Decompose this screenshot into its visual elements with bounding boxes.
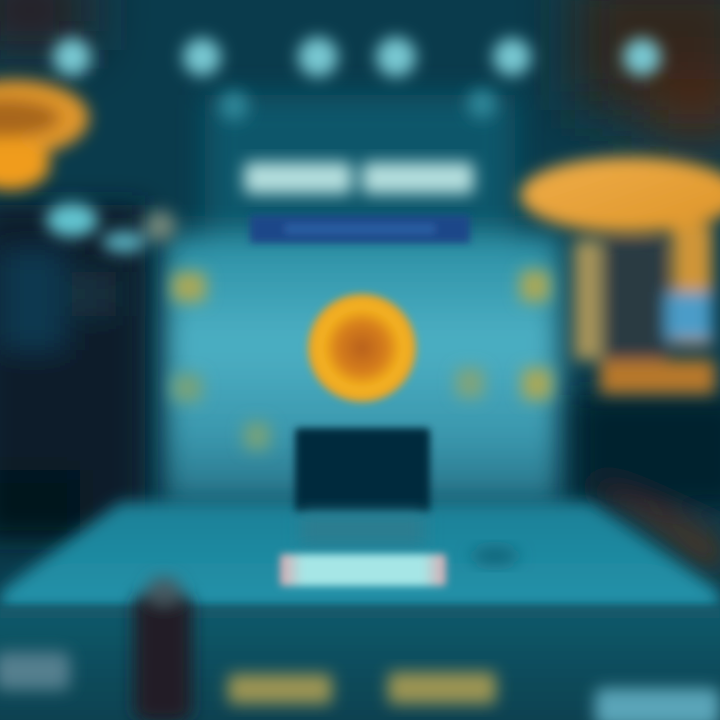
bottom labels, illegible bbox=[228, 672, 496, 704]
blue subtitle bar bbox=[250, 215, 470, 243]
dark foreground object bbox=[134, 578, 192, 720]
laptop keyboard bbox=[280, 554, 446, 586]
coin icon bbox=[308, 294, 416, 402]
bottom corner highlights bbox=[0, 652, 720, 720]
bottom counter band bbox=[0, 606, 720, 720]
laptop hinge bbox=[300, 512, 425, 546]
orange lamp right bbox=[520, 157, 720, 394]
small yellow wall icons bbox=[172, 270, 552, 450]
laptop bbox=[280, 428, 446, 586]
floor object bbox=[471, 547, 519, 565]
orange lamp left bbox=[0, 80, 89, 190]
left glowing shape bbox=[46, 203, 176, 253]
right dark cabinet bbox=[575, 395, 720, 575]
left dark cabinet bbox=[0, 205, 145, 540]
back wall bbox=[165, 95, 560, 505]
laptop screen bbox=[295, 428, 430, 512]
ceiling lights bbox=[53, 37, 661, 121]
floor bbox=[0, 502, 720, 610]
top corner shadows bbox=[0, 0, 720, 140]
title text block, illegible bbox=[244, 162, 474, 194]
